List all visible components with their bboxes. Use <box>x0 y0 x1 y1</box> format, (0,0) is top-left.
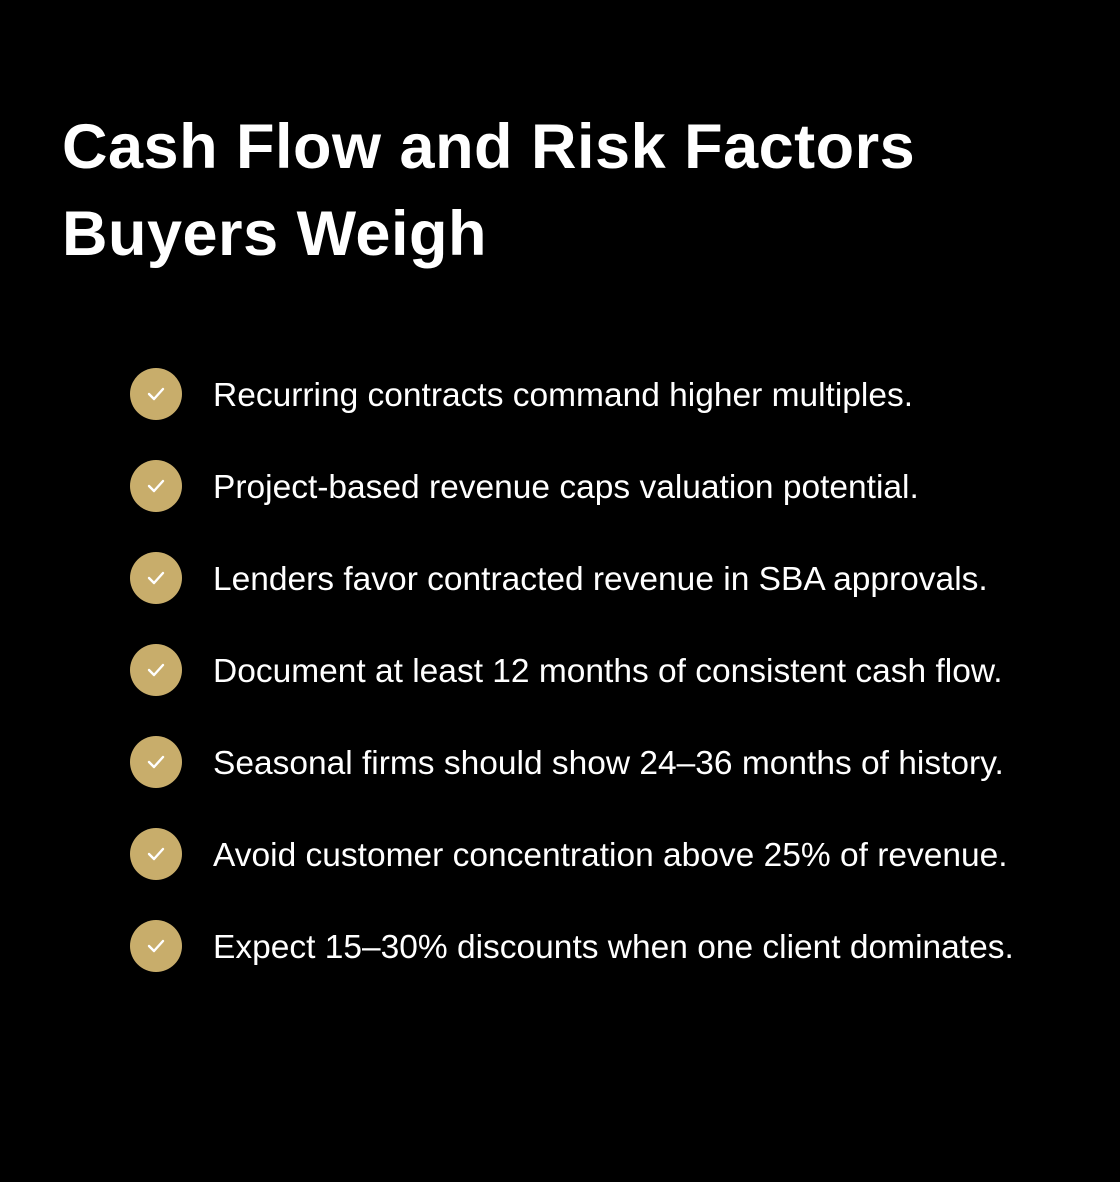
list item 2 <box>130 460 919 512</box>
text: Lenders favor contracted revenue in SBA approvals. <box>213 561 988 598</box>
title <box>62 112 915 269</box>
icon: check <box>130 644 182 696</box>
text: Avoid customer concentration above 25% of revenue. <box>213 837 1008 874</box>
text: Expect 15–30% discounts when one client dominates. <box>213 929 1014 966</box>
list item 1 <box>130 368 913 420</box>
icon: check <box>130 460 182 512</box>
icon: check <box>130 368 182 420</box>
icon: check <box>130 736 182 788</box>
text: Seasonal firms should show 24–36 months of history. <box>213 745 1004 782</box>
text: Document at least 12 months of consistent cash flow. <box>213 653 1003 690</box>
icon: check <box>130 552 182 604</box>
text: Recurring contracts command higher multiples. <box>213 377 913 414</box>
list item 6 <box>130 828 1008 880</box>
icon: check <box>130 920 182 972</box>
list item 5 <box>130 736 1004 788</box>
title: Buyers Weigh <box>62 199 487 269</box>
list item 3 <box>130 552 988 604</box>
list item 4 <box>130 644 1003 696</box>
title: Cash Flow and Risk Factors <box>62 112 915 182</box>
icon: check <box>130 828 182 880</box>
text: Project-based revenue caps valuation potential. <box>213 469 919 506</box>
list item 7 <box>130 920 1014 972</box>
